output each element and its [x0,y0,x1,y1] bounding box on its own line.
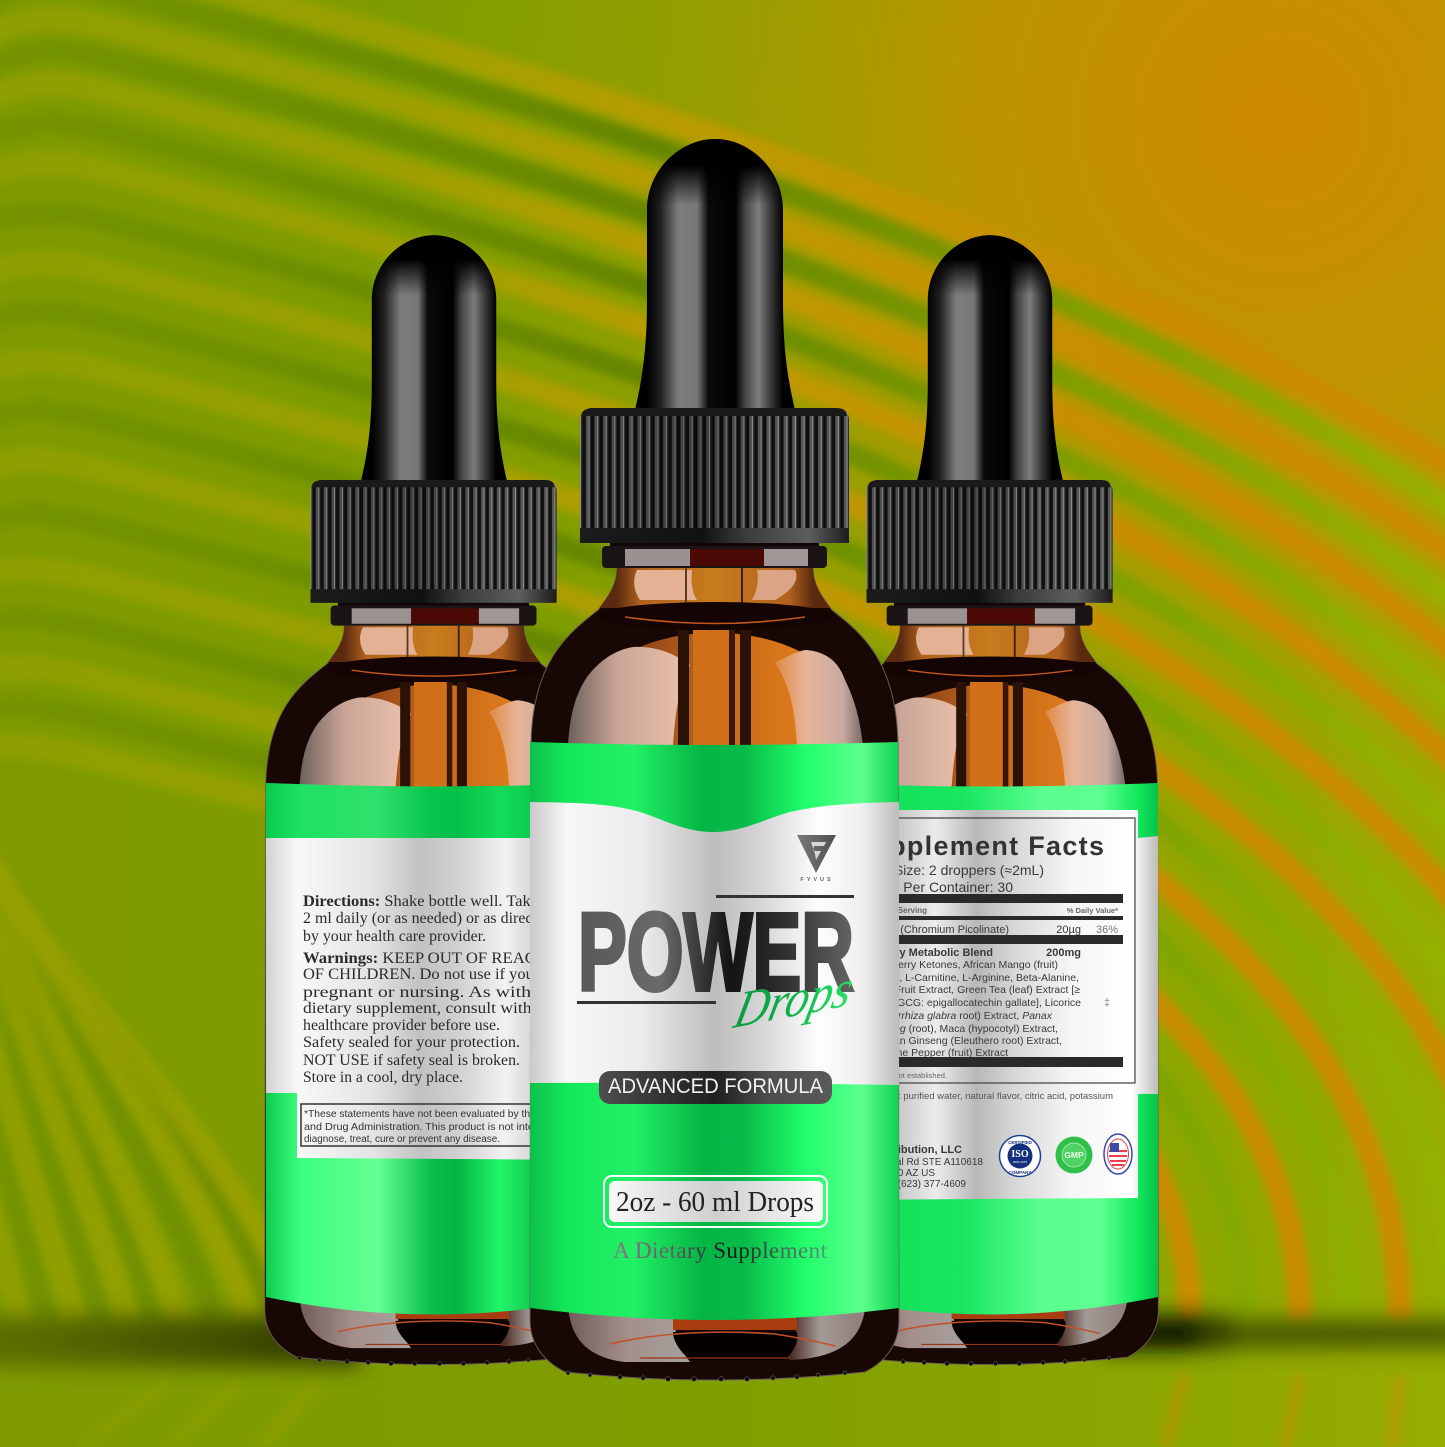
product name POWER: POWER [578,891,854,1014]
FDA disclaimer box: and Drug Administration. This product is not intended to [304,1121,570,1133]
directions and warnings text: Store in a cool, dry place. [303,1069,463,1086]
supplement facts panel [820,818,1135,1190]
left bottle glass and dropper [265,235,602,1366]
supplement facts panel: Fyvus Distribution, LLC [838,1144,962,1156]
directions and warnings text: dietary supplement, consult with your [303,1000,569,1017]
icon: USA flag badge [1104,1134,1132,1174]
icon: ISO certified badge: COMPANY [1009,1170,1031,1175]
supplement facts panel: Cayenne Pepper (fruit) Extract [866,1047,1008,1059]
supplement facts panel: Siberian Ginseng (Eleuthero root) Extract, [867,1035,1062,1047]
directions and warnings text: by your health care provider. [303,928,486,945]
supplement facts panel: 36% [1096,924,1118,936]
directions and warnings text [303,893,569,1086]
icon: ISO certified badge: 9001:2015 [1013,1160,1027,1164]
supplement facts panel: ‡Daily Value not established. [851,1071,947,1080]
FDA disclaimer box: *These statements have not been evaluated by the Food [304,1108,562,1120]
supplement facts panel: Servings Per Container: 30 [845,879,1013,895]
supplement facts heading: Supplement Facts [852,831,1104,861]
center bottle: front label [530,139,899,1381]
supplement facts panel: Garcinia Fruit Extract, Green Tea (leaf) Extract [≥ [853,984,1080,996]
supplement facts panel: (Glycyrrhiza glabra root) Extract, Panax [868,1010,1053,1022]
directions and warnings text: Warnings: KEEP OUT OF REACH [303,950,548,967]
right bottle: supplement facts label [820,235,1158,1366]
supplement facts panel: Proprietary Metabolic Blend [847,947,993,959]
directions and warnings text: OF CHILDREN. Do not use if you are [303,966,558,983]
size box: 2oz - 60 ml Drops [616,1186,814,1218]
icon: GMP certified badge: GMP [1064,1150,1084,1160]
directions and warnings text: Directions: Shake bottle well. Take [303,893,538,910]
supplement facts panel: Phoenix 85340 AZ US [837,1168,935,1179]
icon: ISO certified badge [1000,1136,1040,1176]
supplement facts panel: Serving Size: 2 droppers (≈2mL) [843,862,1044,878]
icon: GMP certified badge [1056,1136,1092,1174]
directions and warnings text: NOT USE if safety seal is broken. [303,1052,520,1069]
icon: FYVUS logo: FYVUS [800,877,834,883]
supplement facts panel: 1234 General Rd STE A110618 [843,1157,983,1168]
product name Drops script: Drops [728,959,859,1040]
right bottle glass and dropper [821,235,1158,1366]
center bottle glass and dropper [530,139,899,1381]
dietary supplement tagline: A Dietary Supplement [613,1238,828,1263]
right bottle label [820,783,1158,1314]
supplement facts panel: Ginseng (root), Maca (hypocotyl) Extract, [867,1023,1058,1035]
supplement facts panel: Amount Per Serving [850,906,927,915]
icon: ISO certified badge: CERTIFIED [1008,1140,1033,1145]
supplement facts panel: Raspberry Ketones, African Mango (fruit) [868,959,1058,971]
directions and warnings text: 2 ml daily (or as needed) or as directed [303,910,552,927]
FDA disclaimer box: diagnose, treat, cure or prevent any disease. [304,1133,500,1145]
center bottle label [530,742,899,1320]
supplement facts panel: Chromium (Chromium Picolinate) [846,924,1009,936]
size box [604,1176,827,1227]
directions and warnings text: pregnant or nursing. As with any [303,984,565,1001]
advanced formula badge [599,1071,832,1104]
FDA disclaimer box [301,1104,596,1146]
ground shadow [0,1316,1445,1366]
left bottle: directions label [265,235,602,1366]
supplement facts panel: 200mg [1046,947,1081,959]
directions and warnings text: healthcare provider before use. [303,1017,500,1034]
left bottle label [266,783,602,1314]
icon: FYVUS logo [797,835,836,883]
supplement facts panel: ‡ [1104,997,1110,1009]
supplement facts panel: 50% EGCG: epigallocatechin gallate], Licorice [866,997,1081,1009]
supplement facts panel: Phone: (623) 377-4609 [863,1179,966,1190]
advanced formula badge: ADVANCED FORMULA [608,1075,823,1098]
product name POWER [577,891,854,1014]
supplement facts panel: Extract, L-Carnitine, L-Arginine, Beta-Alanine, [867,972,1079,984]
icon: ISO certified badge: ISO [1011,1149,1029,1160]
supplement facts panel: 20µg [1056,924,1081,936]
supplement facts panel: % Daily Value* [1067,906,1118,915]
supplement facts panel: Other Ingredients: purified water, natural flavor, citric acid, potassium [825,1091,1113,1102]
directions and warnings text: Safety sealed for your protection. [303,1034,520,1051]
